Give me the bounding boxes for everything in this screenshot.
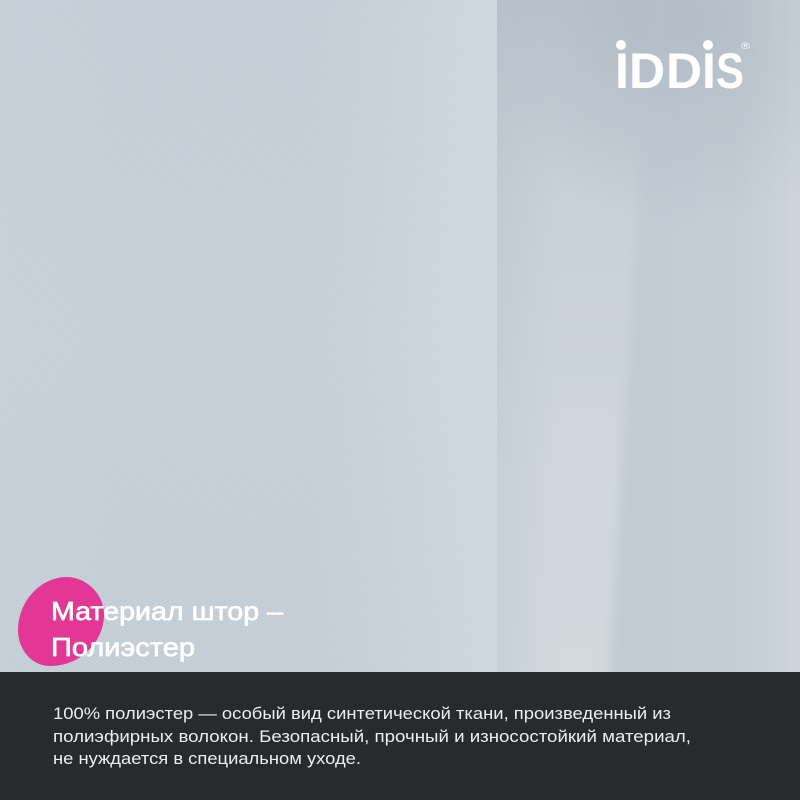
pink blob accent: [18, 577, 104, 666]
bottom dark panel: [0, 672, 800, 800]
description text: 100% полиэстер — особый вид синтетической ткани, произведенный из: [53, 704, 671, 723]
description text: не нуждается в специальном уходе.: [53, 749, 361, 768]
logo: IDDIS: D: [629, 43, 665, 99]
heading: Материал штор –: [51, 596, 284, 626]
logo: IDDIS: I: [702, 43, 716, 99]
logo: IDDIS: ®: [741, 41, 750, 51]
logo: IDDIS: D: [666, 43, 702, 99]
heading: Полиэстер: [51, 632, 195, 662]
logo: IDDIS: I: [615, 43, 629, 99]
heading: [51, 596, 284, 662]
description text: [53, 704, 691, 768]
description text: полиэфирных волокон. Безопасный, прочный и износостойкий материал,: [53, 727, 691, 746]
photo: woven fabric, left part: [0, 0, 497, 672]
photo: blurred curtain fold, right part: [480, 0, 800, 700]
logo: IDDIS: [615, 40, 750, 99]
logo: IDDIS: S: [716, 43, 744, 99]
